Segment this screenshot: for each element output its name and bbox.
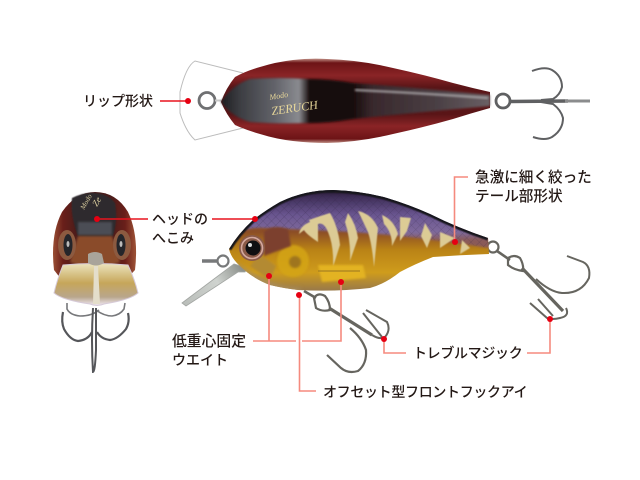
- gold ball weight: [277, 245, 309, 277]
- line: head dent side: [212, 218, 255, 220]
- cheeks: [70, 236, 120, 270]
- black back stripe: [221, 78, 490, 123]
- belly hook: [304, 291, 389, 372]
- front lip: [54, 264, 138, 306]
- lip outline: [180, 61, 243, 140]
- line: tail: [454, 177, 468, 242]
- forehead: [72, 193, 116, 240]
- line: treble right: [527, 319, 550, 353]
- front hook: [62, 303, 129, 372]
- side body: [229, 190, 489, 291]
- top-view lure: [180, 59, 590, 143]
- front logo: [78, 192, 103, 212]
- line: front hook eye: [300, 295, 316, 391]
- gold lower body: [225, 225, 495, 295]
- dark back edge: [229, 190, 488, 249]
- logo: ZERUCH: [270, 97, 320, 118]
- front weight: [250, 256, 276, 276]
- back highlight: [355, 90, 488, 98]
- label: tail shape: テール部形状: [475, 188, 563, 205]
- gill plate: [264, 227, 291, 256]
- front-view lure: [53, 192, 138, 372]
- tail hook: [496, 68, 590, 139]
- top body: [221, 59, 490, 143]
- tiger stripes: [299, 211, 470, 267]
- label: tail shape: 急激に細く絞った: [475, 170, 592, 186]
- nose eyelet and side lip: [218, 256, 228, 266]
- logo: Modo: [268, 90, 289, 102]
- callout dots: [94, 98, 553, 342]
- side-view lure: [182, 186, 589, 372]
- scale texture: [251, 195, 488, 248]
- label: low center of gravity weight: ウエイト: [172, 352, 228, 368]
- label: head dent: へこみ: [152, 230, 194, 246]
- front logo: Modo: [78, 192, 94, 212]
- belly tint: [236, 262, 300, 290]
- eye: [239, 235, 265, 261]
- front logo: Ze: [90, 195, 103, 208]
- line: lip: [160, 100, 188, 102]
- label: offset front hook eye: オフセット型フロントフックアイ: [323, 384, 527, 400]
- line tie: [88, 252, 104, 266]
- logo: [268, 90, 320, 118]
- label: head dent: ヘッドの: [152, 211, 208, 227]
- eyes: [58, 230, 76, 260]
- front body: [53, 192, 136, 295]
- label: low center of gravity weight: 低重心固定: [172, 334, 246, 350]
- label: lip shape: リップ形状: [83, 93, 153, 109]
- nose ring: [199, 92, 215, 108]
- label: treble magic: トレブルマジック: [413, 345, 522, 361]
- callout lines: [97, 101, 550, 391]
- line: head dent front: [97, 218, 148, 220]
- rear weights: [318, 265, 366, 282]
- tail hook: [488, 242, 589, 319]
- purple back: [243, 190, 488, 249]
- line: weight: [253, 276, 341, 341]
- line: treble left: [384, 339, 406, 353]
